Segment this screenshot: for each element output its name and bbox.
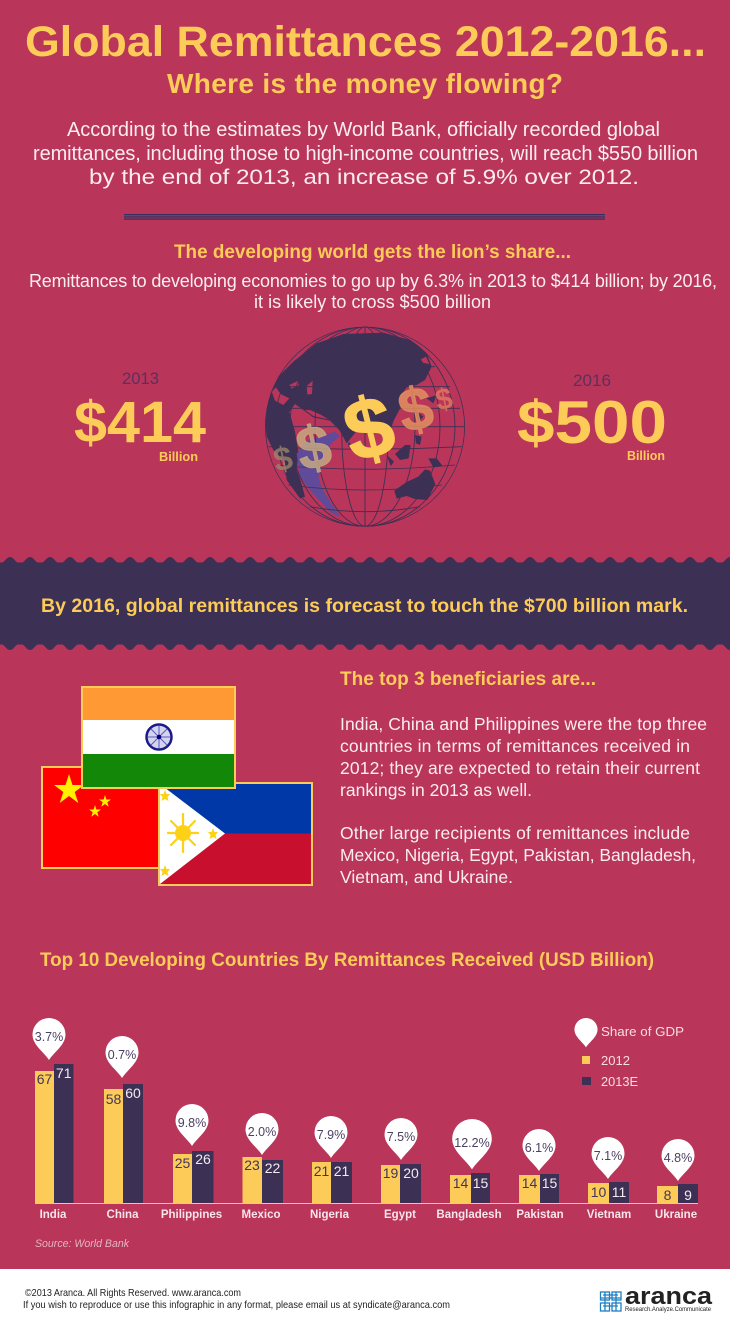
title: Global Remittances 2012-2016... [25,18,706,66]
legend: 2012 [601,1053,630,1068]
section heading: lion's share: The developing world gets the lion’s share... [174,242,571,263]
stat: 2016 $500 billion: Billion [627,448,665,463]
banner: By 2016, global remittances is forecast to touch the $700 billion mark. [41,595,688,617]
text block: top 3: Vietnam, and Ukraine. [340,867,513,887]
globe illustration [265,327,465,526]
bars: India [32,1018,74,1221]
section heading: top 3: The top 3 beneficiaries are... [340,669,596,690]
text block: top 3: India, China and Philippines were the top three [340,714,707,734]
logo: aranca: aranca [625,1283,713,1310]
banner [0,557,730,650]
bars: Bangladesh: 14 [453,1175,468,1191]
chart title: Top 10 Developing Countries By Remittances Received (USD Billion) [40,950,654,971]
bars: Pakistan: 14 [522,1175,537,1191]
bars: India: 67 [37,1071,52,1087]
bars: Vietnam: Vietnam [587,1209,631,1221]
bars: Egypt: 20 [403,1165,419,1181]
flag: India [82,687,235,788]
bars: Bangladesh: 15 [473,1175,488,1191]
intro paragraph [33,119,698,189]
globe grid [265,327,465,526]
gaps: seas in Europe [272,357,429,419]
bars: Egypt: 19 [383,1165,398,1181]
text block: top 3: rankings in 2013 as well. [340,780,532,800]
bars: Nigeria: 21 [334,1163,349,1179]
bars: China: China [107,1209,139,1221]
section text: developing economies: it is likely to cross $500 billion [254,292,491,312]
bars: Ukraine: 4.8% [664,1151,692,1165]
bars: China [104,1036,143,1221]
dollar signs: $ [432,382,456,418]
bars: Philippines: 9.8% [178,1116,206,1130]
bars: China: 60 [125,1085,141,1101]
legend: 2013E [601,1074,638,1089]
text block: top 3 [340,714,707,887]
stat: 2013 $414 billion [74,369,206,464]
text block: top 3: Mexico, Nigeria, Egypt, Pakistan, Bangladesh, [340,845,696,865]
bars: Ukraine: 9 [684,1187,692,1203]
subtitle: Where is the money flowing? [167,68,563,99]
bars: Philippines: Philippines [161,1209,222,1221]
bars: Philippines: 25 [175,1155,190,1171]
bars: Mexico: 23 [244,1157,260,1173]
bars: Vietnam: 7.1% [594,1149,622,1163]
bars: Mexico [242,1113,283,1221]
stat: 2016 $500 billion: 2016 [573,371,611,390]
bars: Egypt [381,1118,421,1221]
dollar signs: $ [290,411,337,484]
land: Eurasia and Africa [265,333,432,498]
dollar signs: $ [335,377,404,481]
bars: Vietnam [587,1137,631,1221]
bars: Nigeria: 7.9% [317,1128,345,1142]
bars: Ukraine: 8 [664,1187,672,1203]
bars: Bangladesh [436,1119,502,1221]
text block: top 3: countries in terms of remittances received in [340,736,690,756]
bars: Philippines: 26 [195,1151,211,1167]
footer text: If you wish to reproduce or use this infographic in any format, please email us at syndicate@aranca.com [23,1299,450,1311]
bars: Philippines [161,1104,222,1221]
intro paragraph: by the end of 2013, an increase of 5.9% over 2012. [89,166,639,189]
logo: aranca [600,1283,713,1313]
stat: 2013 $414 billion: Billion [159,449,198,464]
flag: China [42,767,160,868]
bars: Egypt: Egypt [384,1209,416,1221]
stat: 2013 $414 billion: 2013 [122,369,159,388]
stat: 2016 $500 billion [517,371,667,463]
intro paragraph: remittances, including those to high-income countries, will reach $550 billion [33,143,698,165]
bars: China: 58 [106,1091,121,1107]
bars: Mexico: 22 [265,1160,280,1176]
bars: Egypt: 7.5% [387,1130,415,1144]
icon: logo mark [600,1292,621,1311]
dollar signs [270,373,456,484]
bars: Bangladesh: 12.2% [454,1136,490,1150]
bars: Vietnam: 11 [612,1184,626,1200]
section text: developing economies: Remittances to developing economies to go up by 6.3% in 2013 to $414 billion; by 2016, [29,271,717,291]
bars: Mexico: 2.0% [248,1125,276,1139]
bars: Nigeria: 21 [314,1163,329,1179]
dollar signs: $ [392,373,439,446]
text block: top 3: Other large recipients of remittances include [340,823,690,843]
bars: Mexico: Mexico [242,1209,280,1221]
bars: Nigeria [310,1116,352,1221]
stat: 2016 $500 billion: $500 [517,389,667,456]
footer text [23,1287,450,1311]
source note: Source: World Bank [35,1238,129,1250]
bars: Vietnam: 10 [591,1184,606,1200]
stat: 2013 $414 billion: $414 [74,390,206,455]
logo: aranca: Research.Analyze.Communicate [625,1307,712,1313]
bars: Ukraine: Ukraine [655,1209,697,1221]
land: South America region [297,432,341,517]
bars: Ukraine [655,1139,698,1221]
footer text: ©2013 Aranca. All Rights Reserved. www.aranca.com [25,1287,241,1299]
flags [42,687,312,885]
bars: Pakistan: 15 [542,1175,557,1191]
bars: India: 3.7% [35,1030,63,1044]
bars: India: 71 [56,1065,72,1081]
bars: India: India [40,1209,67,1221]
legend: Share of GDP [601,1024,684,1039]
section text: developing economies [29,271,717,312]
intro paragraph: According to the estimates by World Bank, officially recorded global [67,119,660,141]
bars: Nigeria: Nigeria [310,1209,350,1221]
bars: China: 0.7% [108,1048,136,1062]
bars: Bangladesh: Bangladesh [436,1209,502,1221]
flag: Philippines [159,783,312,885]
bars: Pakistan [516,1129,564,1221]
bar chart [32,1018,698,1221]
land: Australia [394,469,435,500]
legend [574,1018,684,1089]
bars: Pakistan: Pakistan [516,1209,564,1221]
dollar signs: $ [270,440,297,480]
bars: Pakistan: 6.1% [525,1141,553,1155]
land: islands [348,395,443,467]
text block: top 3: 2012; they are expected to retain their current [340,758,700,778]
